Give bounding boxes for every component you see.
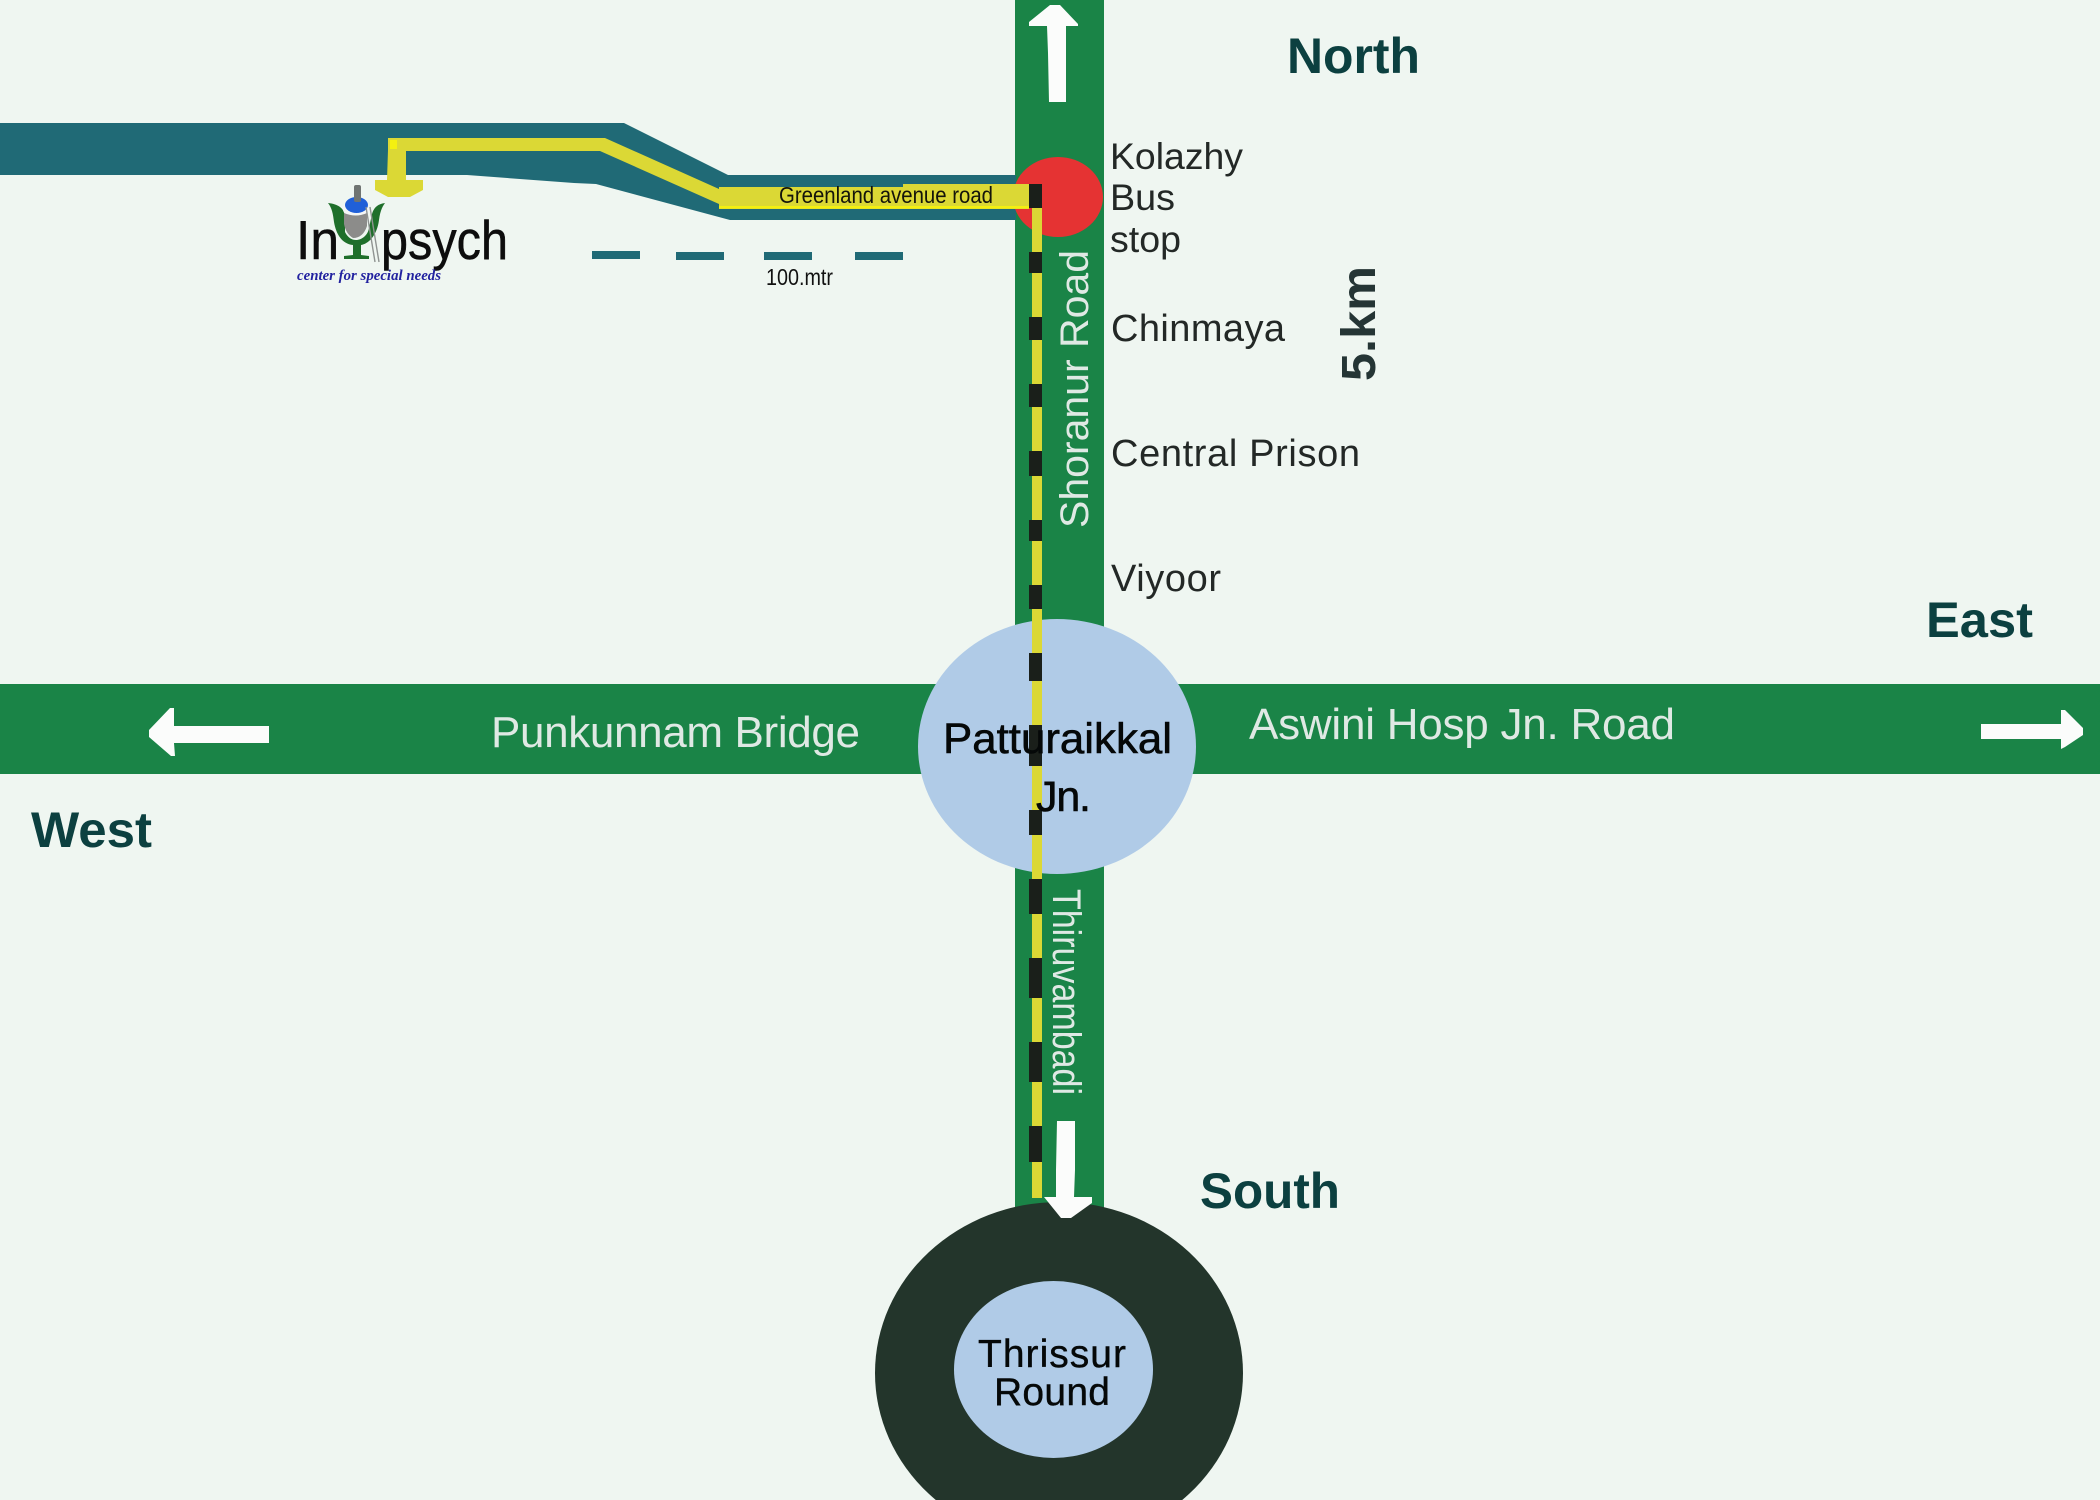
label: 100.mtr: 100.mtr xyxy=(766,264,833,290)
roundabout label: Thrissur Round: Round xyxy=(994,1371,1110,1414)
logo icon: blue brain xyxy=(345,197,368,213)
logo: Inpsych xyxy=(296,185,508,284)
stop label: Viyoor: Viyoor xyxy=(1111,558,1221,600)
distance label: 5.km: 5.km xyxy=(1333,266,1386,381)
road: Greenland avenue road xyxy=(0,123,1016,220)
junction label: Patturaikkal Jn. xyxy=(943,715,1172,821)
junction: Patturaikkal Jn. circle xyxy=(918,619,1196,874)
route: yellow path along Greenland avenue xyxy=(375,138,1029,209)
heading: North: North xyxy=(1287,28,1420,84)
roundabout label: Thrissur Round: Thrissur xyxy=(978,1333,1126,1376)
stop label: Kolazhy Bus stop: stop xyxy=(1110,219,1181,260)
label: Greenland avenue road: Greenland avenue road xyxy=(779,182,993,208)
logo icon: green psi symbol xyxy=(328,203,385,259)
stop label: Kolazhy Bus stop xyxy=(1110,136,1243,260)
route: black dashes on vertical road xyxy=(1029,184,1042,1162)
junction label: Patturaikkal Jn.: Jn. xyxy=(1036,773,1091,821)
roundabout: Thrissur Round ring xyxy=(875,1202,1243,1500)
road: east-west road xyxy=(0,684,2100,774)
heading: East: East xyxy=(1926,592,2033,648)
logo icon: tool on head xyxy=(354,185,361,202)
roundabout label: Thrissur Round xyxy=(978,1333,1126,1414)
heading: West: West xyxy=(31,802,152,858)
marker: Kolazhy bus stop xyxy=(1013,157,1103,237)
road label: Thiruvambadi: Thiruvambadi xyxy=(1044,889,1088,1095)
heading: South: South xyxy=(1200,1163,1340,1219)
arrow: west xyxy=(149,708,269,756)
logo text: In: In xyxy=(296,209,339,271)
stop label: Chinmaya: Chinmaya xyxy=(1111,308,1286,350)
route: yellow line along vertical road xyxy=(1032,208,1042,1198)
logo tagline: center for special needs xyxy=(297,268,441,284)
logo icon: white rim under brain xyxy=(343,200,369,218)
arrow: north xyxy=(1029,5,1078,102)
arrow: east xyxy=(1981,710,2083,749)
road label: Shoranur Road: Shoranur Road xyxy=(1053,250,1097,528)
stop label: Kolazhy Bus stop: Bus xyxy=(1110,177,1175,218)
road: Shoranur vertical road xyxy=(1015,0,1104,1210)
logo text: psych: psych xyxy=(381,209,508,271)
arrow: south xyxy=(1044,1121,1092,1218)
logo icon: face xyxy=(344,213,367,238)
junction label: Patturaikkal Jn.: Patturaikkal xyxy=(943,715,1172,763)
road label: Aswini Hosp Jn. Road: Aswini Hosp Jn. Road xyxy=(1249,700,1675,749)
road label: Punkunnam Bridge: Punkunnam Bridge xyxy=(491,708,860,757)
stop label: Central Prison: Central Prison xyxy=(1111,433,1360,475)
stop label: Kolazhy Bus stop: Kolazhy xyxy=(1110,136,1243,177)
roundabout: Thrissur Round centre xyxy=(954,1281,1153,1458)
logo icon: ladder xyxy=(366,207,379,262)
scale: dashed 100 metre bar xyxy=(592,251,903,260)
